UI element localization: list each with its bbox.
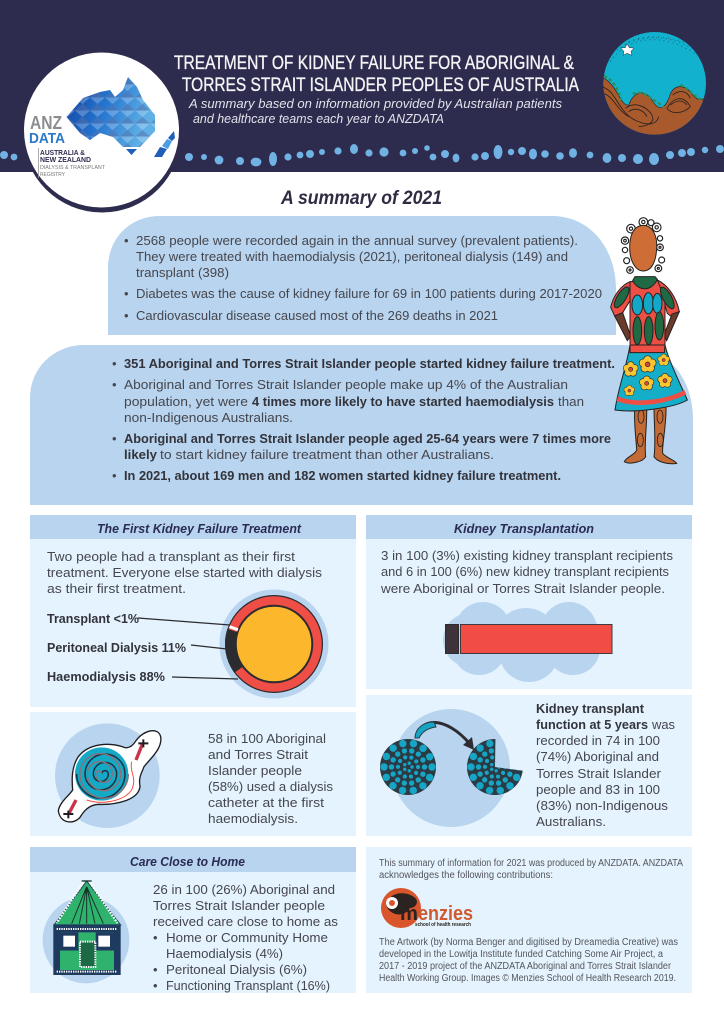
text: new patients bullets: • [112,377,117,392]
panel: acknowledgements [366,847,692,993]
text: care close to home: Functioning Transplant (16%) [166,978,330,993]
text: new patients bullets: than [558,394,584,409]
text: first treatment intro: treatment. Everyone else started with dialysis [47,565,323,580]
text: transplant recipients: were Aboriginal or Torres Strait Islander people. [380,581,665,596]
text: transplant function: (83%) non-Indigenous [536,798,669,813]
panel: prevalent patients summary [108,216,616,335]
text: care close to home: • [153,930,158,945]
text: care close to home [153,882,339,993]
text: transplant function: (74%) Aboriginal and [536,749,659,764]
text: prevalent patients bullets: • [124,308,129,323]
icon: house [43,880,129,983]
text: new patients bullets: to start kidney failure treatment than other Australians. [160,447,494,462]
text: new patients bullets: population, yet were [124,394,248,409]
text: transplant function [536,701,675,829]
text: transplant recipients [380,548,674,596]
text: catheter statistic: (58%) used a dialysis [208,779,334,794]
text: artwork credit [379,937,678,984]
logo wordmark [29,113,106,178]
title: TORRES STRAIT ISLANDER PEOPLES OF AUSTRALIA [182,74,579,96]
text: new patients bullets: • [112,356,117,371]
chart labels and leader lines: Haemodialysis 88% [47,669,165,684]
text: transplant function: people and 83 in 100 [536,782,660,797]
text: transplant recipients: and 6 in 100 (6%) new kidney transplant recipients [381,564,669,579]
logo wordmark: REGISTRY [40,172,65,178]
subtitle: A summary based on information provided by Australian patients [188,97,562,111]
panel: new patients summary [30,345,693,505]
subtitle: and healthcare teams each year to ANZDATA [193,112,444,126]
text: first treatment intro [47,549,323,596]
text: new patients bullets: Aboriginal and Torres Strait Islander people make up 4% of the Australian [124,377,568,392]
logo wordmark: DIALYSIS & TRANSPLANT [40,165,106,171]
icon: Australia map [66,77,175,157]
text: prevalent patients bullets: transplant (398) [136,265,229,280]
text: new patients bullets: likely [124,447,158,462]
text: catheter statistic: 58 in 100 Aboriginal [208,731,326,746]
text: care close to home: • [153,978,158,993]
text: prevalent patients bullets: 2568 people were recorded again in the annual survey (prevalent patients). [136,233,578,248]
logo: Menzies: school of health research [415,922,472,928]
text: transplant function: function at 5 years [536,717,648,732]
text: new patients bullets: Aboriginal and Torres Strait Islander people aged 25-64 years were 7 times more [124,431,611,446]
ANZDATA logo [22,52,182,212]
icon: landscape roundel [602,32,709,140]
chart labels and leader lines: Peritoneal Dialysis 11% [47,640,186,655]
heading: Care Close to Home [130,854,245,869]
icon: cloud backdrop [443,602,603,682]
header band [0,0,724,172]
text: prevalent patients bullets: Diabetes was the cause of kidney failure for 69 in 100 patients during 2017-2020 [136,286,602,301]
text: acknowledgement intro: acknowledges the following contributions: [379,870,553,881]
title: TREATMENT OF KIDNEY FAILURE FOR ABORIGINAL & [174,52,574,74]
text: prevalent patients bullets: • [124,286,129,301]
logo wordmark: NEW ZEALAND [40,157,91,164]
heading: A summary of 2021: A summary of 2021 [280,188,442,209]
text: new patients bullets: In 2021, about 169 men and 182 women started kidney failure treatment. [124,468,561,483]
text: care close to home: received care close to home as [153,914,339,929]
text: artwork credit: 2017 - 2019 project of the ANZDATA Aboriginal and Torres Strait Islander [379,961,672,972]
text: prevalent patients bullets: Cardiovascular disease caused most of the 269 deaths in 2021 [136,308,498,323]
donut chart: first treatment share [220,590,328,698]
panel: kidney transplant function [366,695,692,836]
head [630,225,657,271]
text: transplant function: Australians. [536,814,606,829]
text: new patients bullets: • [112,468,117,483]
text: first treatment intro: as their first treatment. [47,581,186,596]
text: new patients bullets: 351 Aboriginal and Torres Strait Islander people started kidney failure treatment. [124,356,615,371]
text: acknowledgement intro: This summary of information for 2021 was produced by ANZDATA. ANZDATA [379,858,683,869]
text: catheter statistic: catheter at the first [208,795,324,810]
icon: catheter coil [55,723,161,828]
dress skirt [615,345,687,411]
text: artwork credit: developed in the Lowitja Institute funded Catching Some Air Project, a [379,949,663,960]
logo wordmark: DATA [29,130,65,147]
text: catheter statistic [208,731,334,826]
arrow [415,722,474,750]
text: catheter statistic: and Torres Strait [208,747,308,762]
text: transplant function: was [651,717,675,732]
logo wordmark: ANZ [30,113,62,133]
logo: Menzies [381,888,473,928]
logo wordmark: AUSTRALIA & [40,150,85,157]
icon: kidney function discs [380,709,523,827]
text: care close to home: Torres Strait Islander people [153,898,325,913]
title [174,52,579,96]
text: prevalent patients bullets: They were treated with haemodialysis (2021), peritoneal dialysis (149) and [136,249,568,264]
text: new patients bullets [112,356,615,483]
heading: The First Kidney Failure Treatment [97,521,302,536]
subtitle [188,97,562,126]
arms and torso [611,282,630,316]
heading: Kidney Transplantation [454,521,594,536]
chart labels and leader lines: Transplant <1% [47,611,139,626]
hair curls [621,218,665,273]
text: first treatment intro: Two people had a transplant as their first [47,549,295,564]
text: care close to home: Haemodialysis (4%) [166,946,283,961]
dotted band [0,144,724,166]
text: artwork credit: Health Working Group. Images © Menzies School of Health Research 2019. [379,973,676,984]
text: new patients bullets: non-Indigenous Australians. [124,410,293,425]
text: transplant function: recorded in 74 in 100 [536,733,660,748]
panel: kidney transplantation [366,515,692,689]
text: prevalent patients bullets [124,233,602,323]
text: care close to home: Home or Community Home [166,930,328,945]
text: care close to home: 26 in 100 (26%) Aboriginal and [153,882,335,897]
text: prevalent patients bullets: • [124,233,129,248]
text: transplant recipients: 3 in 100 (3%) existing kidney transplant recipients [381,548,674,563]
text: new patients bullets: 4 times more likely to have started haemodialysis [252,394,554,409]
legs [624,407,647,463]
logo: Menzies: enzies [418,903,473,925]
text: catheter statistic: haemodialysis. [208,811,298,826]
text: artwork credit: The Artwork (by Norma Benger and digitised by Dreamedia Creative) was [379,937,678,948]
logo: Menzies: m [400,903,418,925]
text: care close to home: • [153,962,158,977]
panel: the first kidney failure treatment [30,515,356,707]
chart labels and leader lines [47,611,238,684]
text: transplant function: Torres Strait Islander [536,766,662,781]
text: care close to home: Peritoneal Dialysis (6%) [166,962,307,977]
panel: care close to home [30,847,356,993]
text: transplant function: Kidney transplant [536,701,645,716]
figure: woman in patterned dress [611,218,687,464]
panel: dialysis catheter [30,712,356,836]
bar: 3 in 100 proportion [446,624,612,654]
text: catheter statistic: Islander people [208,763,302,778]
text: acknowledgement intro [379,858,683,881]
text: new patients bullets: • [112,431,117,446]
